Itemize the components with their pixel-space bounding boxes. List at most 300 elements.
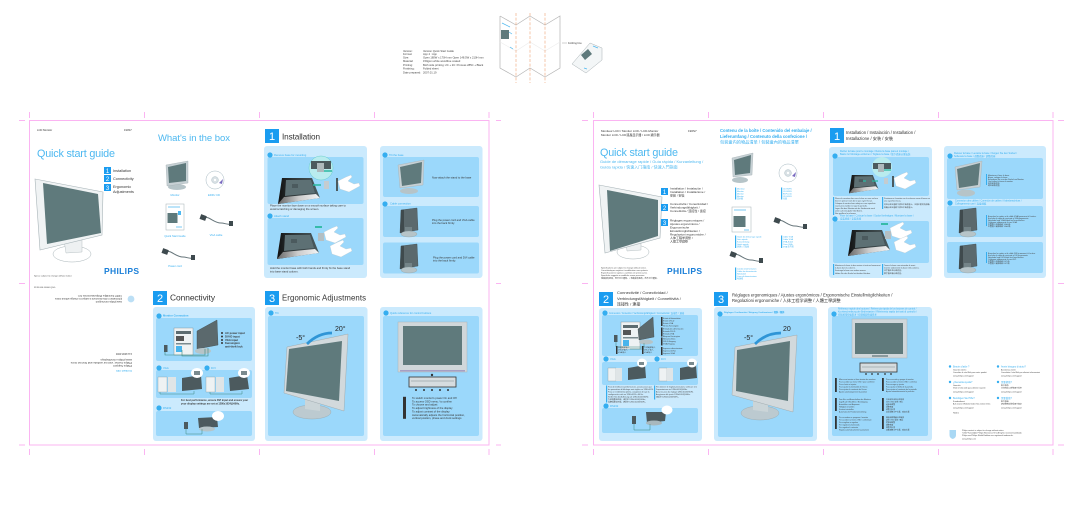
step A instructions: Non graffiare lo schermo. — [835, 212, 857, 215]
cover monitor: right sheet — [599, 185, 662, 259]
upside-down back cover: contact info: Contact info — [116, 369, 132, 373]
heading: contents of the box multilingual: Contenu de la boîte / Contenido del embalaje / — [720, 128, 813, 133]
step C monitor: 現在安裝底座。 — [988, 183, 1001, 187]
box item: guide with languages: Kurzanleitung — [737, 240, 749, 244]
step D heading — [947, 200, 1022, 206]
contact block: right column: www.philips.com/support — [1001, 406, 1022, 410]
button legend: Para encender y apagar el monitor — [886, 378, 914, 381]
button legend: Para ajustar el contraste de la pantalla — [886, 388, 917, 391]
cover footnotes: right sheet — [601, 266, 659, 280]
step D first rear view — [400, 208, 475, 237]
box item: VGA with languages — [773, 217, 807, 248]
port legend: DVI-D input — [225, 334, 240, 338]
cover footnotes — [34, 274, 73, 289]
step D power: RS232 — [163, 406, 172, 410]
connection diagram — [614, 317, 654, 349]
upside-down back cover: contact info: www.philips.com/displays — [100, 358, 132, 362]
contact block: right column: 請瀏覽網站取得更多資訊 — [1001, 402, 1022, 406]
step B note — [270, 266, 351, 274]
print specification block: 2007.01.19 — [423, 70, 437, 74]
panel: installation right — [380, 146, 482, 278]
step B instructions: 雙手握住顯示器底座。 — [884, 271, 903, 275]
step A instructions: unten auf eine glatte Oberfläche. — [835, 210, 863, 212]
step B instructions: Maintenez la base à deux mains et insérez fermement — [835, 264, 881, 267]
step B VGA: VGA — [163, 366, 169, 370]
upside-down back cover: legal notes: Information in this document is subject to change without notice — [54, 297, 122, 300]
step B instructions: 双手握住显示器底座。 — [884, 268, 903, 272]
button legend: 选择和调整 — [886, 402, 895, 406]
port legends: VGA 輸入 — [644, 350, 652, 354]
button legend: Regola automaticamente la posizione — [839, 428, 869, 432]
contents index: right sheet: Verbindungsfähigkeit / — [670, 206, 700, 210]
upside-down back cover: contact info: 411-9388-0000 — [115, 352, 132, 355]
contact block: right column: www.philips.com/support — [1001, 374, 1022, 378]
button legend: Per regolare il contrasto — [839, 426, 858, 429]
control button legend: vertical position, phase and clock settings — [412, 416, 462, 420]
step B illustration — [848, 222, 916, 256]
box item: power cord: Power cord — [168, 264, 182, 268]
print specification block: Printing: — [403, 63, 413, 67]
performance notes: configuración está en 1280x1024 a 60 Hz. — [608, 393, 644, 396]
performance notes: Asegúrese del ajuste 1280x1024@60Hz. — [656, 393, 691, 396]
box item: monitor with languages: Monitor — [737, 195, 744, 198]
upside-down back cover: contact info: Philips Center, visit our website and find out more — [70, 361, 132, 365]
heading: What's in the box: What's in the box — [158, 133, 230, 144]
title: Quick start guide multilingual: Quick start guide — [600, 147, 678, 159]
subtitle languages: Guide de démarrage rapide / Guía rápida / Kurzanleitung / — [600, 159, 704, 164]
button legend: Mise sous tension et hors tension du moniteur — [839, 378, 876, 381]
step C heading: Relever la base / Levante la base / Neigen Sie den Sockel / — [954, 152, 1017, 155]
button legend: Auswählen und Anpassen — [839, 403, 860, 406]
box item: power cord with languages: Netzkabel — [737, 272, 746, 276]
port legend: VGA input — [225, 338, 238, 342]
step A illustration — [849, 157, 916, 193]
contents index: right sheet: 2 — [663, 206, 667, 212]
button legend: 調整亮度 — [886, 422, 893, 426]
performance notes: Per ottenere le migliori prestazioni, verificare che — [656, 386, 697, 388]
button legend: 開啟和關閉顯示器電源 — [886, 415, 904, 419]
heading: installation multilingual: Installazione / 安装 / 安裝 — [846, 135, 894, 142]
port legends: Entrée DVI-D — [663, 320, 675, 322]
button legend: 开启和关闭显示器电源 — [886, 397, 904, 401]
step D first rear view with text: 牢固插入电源线和 VGA 线。 — [988, 222, 1012, 226]
contents index: right sheet — [661, 186, 708, 244]
step A illustration — [278, 156, 360, 204]
port legends: Entrée VGA — [663, 322, 674, 325]
performance notes: 为获得最佳性能，请设定 1280x1024@60Hz。 — [608, 397, 647, 401]
step D second rear view: Plug the power cord and DVI cable — [433, 256, 475, 260]
control button legend — [403, 396, 465, 420]
step A heading: Remove base for mounting — [274, 153, 307, 157]
heading: Ergonomic Adjustments — [265, 291, 366, 305]
contact block: left column: Garantie clients : — [953, 368, 968, 372]
contact block: left column: Benötigen Sie Hilfe? — [953, 397, 975, 400]
button legend: Pour accéder au menu OSD / pour confirmer — [839, 382, 875, 384]
port legend: Kensington — [225, 341, 240, 345]
panel: tilt multilingual — [714, 307, 817, 441]
Philips logo: right sheet: PHILIPS — [667, 266, 702, 276]
contents index: right sheet: Connettività / 连接性 / 連接 — [670, 208, 706, 213]
contact block: right column: Avete bisogno di aiuto? — [1001, 366, 1026, 368]
port legends: VGA 输入 — [618, 350, 626, 354]
step D second rear view with text: Branchez le cordon et le câble DVI fermement à l'arrière. — [988, 252, 1036, 255]
box item: power cord with languages: 电源线 — [737, 276, 743, 280]
Philips shield and legal note — [950, 429, 1023, 440]
performance notes: 请设定 1280x1024@60Hz。 — [656, 394, 680, 398]
box item: guide with languages — [732, 207, 762, 248]
print specification block — [403, 49, 484, 74]
cover header: right sheet: 190S7 — [688, 129, 697, 133]
upside-down back cover: contact info: Philips Support — [113, 364, 132, 368]
contents index: right sheet: Ajustes ergonómicos / — [670, 222, 700, 226]
title: Quick start guide: Quick start guide — [37, 148, 115, 160]
contact block: right column: 需要幫助? — [1001, 396, 1013, 400]
print specification block: Date prepared: — [403, 70, 421, 74]
heading: connectivity multilingual: 连接性 / 連接 — [617, 300, 640, 306]
box item: monitor with languages: 显示器 — [737, 196, 743, 200]
performance notes: Para un rendimiento óptimo, asegúrese de que la — [608, 390, 650, 394]
heading: Connectivity: 2 — [157, 293, 163, 305]
contact block: right column: 客戶服務: — [1001, 399, 1010, 403]
performance note — [181, 399, 248, 406]
cover header: left sheet: LCD Monitor — [37, 128, 52, 132]
heading: Installation: 1 — [269, 131, 275, 143]
step A instructions: suave procurando no rayar la pantalla. — [835, 204, 868, 208]
step A instructions: Coloque el monitor boca abajo en una superficie — [835, 202, 876, 205]
step A note: Place the monitor face down on a smooth surface taking care to — [270, 204, 346, 208]
port legends — [616, 317, 683, 355]
print specification block: Folded sheet — [423, 66, 439, 70]
cover footnotes: right sheet: Specifiche soggette a modifiche senza preavviso. — [601, 274, 645, 277]
panel: installation multilingual left — [829, 147, 932, 278]
contact block: left column: ¿Necesita ayuda? — [953, 381, 973, 384]
heading: Ergonomic Adjustments: Ergonomic Adjustments — [282, 294, 366, 302]
button legend: Para acceder al menú OSD / confirmar — [886, 382, 917, 384]
port legends: Entrada VGA — [663, 332, 675, 336]
step A heading: Tilt — [275, 311, 279, 315]
button legend: Per regolare la luminosità — [839, 424, 859, 426]
step B heading: 控制按钮快速参考 / 控制按鈕快速參考 — [838, 312, 877, 316]
step A instructions: Placez le moniteur face vers le bas sur une surface — [835, 197, 878, 200]
box item: VGA cable — [199, 214, 233, 237]
cover monitor illustration — [35, 179, 103, 262]
upside-down back cover: legal notes: ©2007 Koninklijke Philips Electronics N.V. — [77, 294, 122, 297]
performance notes: l'impostazione sia 1280x1024@60Hz. — [656, 388, 688, 391]
Philips logo: PHILIPS — [104, 266, 139, 276]
contact block: left column: www.philips.com/support — [953, 374, 974, 378]
heading: Connectivity: Connectivity — [170, 292, 216, 302]
panel: connectivity — [153, 307, 255, 441]
box item: VGA with languages: Cable VGA — [783, 238, 794, 241]
print specification block: Size: — [403, 56, 409, 60]
contents index: Installation — [113, 169, 131, 173]
box item: power cord with languages — [729, 251, 763, 280]
contents index: 3 — [106, 186, 110, 192]
button legend: 訪問 OSD 選單 / 確認 — [886, 418, 903, 422]
performance note: your display settings are set at 1280x1024@60Hz. — [181, 402, 240, 406]
contents index: right sheet: 1 — [663, 190, 667, 196]
step A heading: Retirer la base pour le montage / Retire la base para el montaje / — [840, 150, 909, 153]
button legend: Zugriff auf OSD-Menü / Bestätigung — [839, 400, 868, 404]
tilt illustration — [732, 326, 797, 420]
heading: Connectivity — [153, 291, 216, 305]
step C monitor: Ahora, coloque la base. — [988, 176, 1008, 179]
heading: contents of the box multilingual — [720, 128, 813, 146]
step C heading: Tilt the base — [389, 153, 404, 157]
button legend: 自动调整水平位置、垂直位置 — [886, 410, 910, 414]
contact block: right column: 需要帮助? — [1001, 380, 1013, 384]
step A instructions: lisse en prenant soin de ne pas rayer l'écran. — [835, 200, 873, 202]
step C DVI: DVI — [661, 357, 666, 361]
step D power: RS232 — [610, 404, 619, 408]
heading: connectivity multilingual: Connectivité / Conectividad / — [617, 290, 669, 295]
box item: monitor with languages: Monitor — [737, 192, 744, 196]
step B instructions: Tenere la base con entrambe le mani. — [884, 264, 916, 267]
button legend: Kontrast einstellen — [839, 408, 854, 411]
performance notes — [606, 386, 697, 404]
contact block: right column: 客户服务: — [1001, 383, 1010, 387]
cover header: left sheet — [37, 128, 132, 132]
contact block: right column: www.philips.com/support — [1001, 390, 1022, 394]
port legends: Entrée d'alimentation — [663, 317, 681, 320]
cover footnotes: right sheet: Especificaciones sujetas a cambios sin previo aviso. — [601, 272, 648, 274]
button legend: Ajusta automáticamente la posición — [886, 390, 914, 393]
contents index: right sheet: Einstellmöglichkeiten / — [670, 229, 700, 233]
heading: installation multilingual — [830, 128, 916, 143]
control button legend: To adjust brightness of the display — [412, 406, 453, 410]
Philips shield and legal note: www.philips.com — [962, 438, 976, 440]
box item: EDFU CD — [206, 171, 224, 197]
step D second rear view with text: 牢固插入电源线和 DVI 线。 — [988, 259, 1011, 263]
control button strip — [409, 374, 456, 391]
contents index: 2 — [106, 177, 110, 183]
box item: CD with languages: EDFU-CD — [783, 194, 793, 196]
heading: contents of the box multilingual: Lieferumfang / Contenuto della confezione / — [720, 134, 808, 139]
box item: VGA cable: VGA cable — [210, 233, 223, 237]
folded booklet thumbnail — [572, 43, 602, 73]
button legend: 調整對比度 — [886, 425, 895, 429]
step A instructions: una superficie liscia. — [884, 200, 901, 202]
box item: EDFU CD: EDFU CD — [208, 193, 220, 197]
step D second rear view with text: Collegare saldamente il cavo DVI. — [988, 258, 1017, 261]
port legends: Bloqueo Kensington — [663, 335, 680, 338]
step A heading — [832, 150, 911, 159]
contents index: Ergonomic — [113, 185, 131, 189]
button legend: 访问 OSD 菜单 / 确认 — [886, 400, 903, 404]
contact block: left column: Visite el sitio web para obtener soporte — [953, 386, 986, 390]
print specification block: Both side printing: 2C + 2C: Process 285C + Black — [423, 63, 484, 67]
box item: monitor: Monitor — [171, 193, 180, 197]
heading: connectivity multilingual — [599, 290, 682, 306]
step D first rear view with text: Collegare saldamente il cavo VGA. — [988, 221, 1018, 224]
port legend: anti-theft lock — [225, 344, 243, 348]
box item: power cord with languages: Cavo di alimentazione — [737, 275, 758, 278]
box item: CD with languages: CD EDFU — [783, 191, 792, 193]
heading: Installation — [265, 129, 320, 143]
port legends: VGA-Eingang — [663, 342, 675, 346]
contents index: right sheet: Connectivité / Conectividad / — [670, 202, 708, 206]
step D first rear view with text: Branchez le cordon et le câble VGA fermement à l'arrière. — [988, 215, 1037, 218]
contents index: right sheet: Installation / Installazione / — [670, 190, 705, 194]
step C monitor: Now attach the stand to the base — [432, 176, 472, 180]
control button strip — [860, 363, 897, 375]
step B heading: Référence rapide des boutons / Referencia rápida de los botones de control / — [838, 308, 917, 310]
box item: power cord with languages: Cable de alimentación — [737, 270, 757, 273]
button legend: 選擇和調整 — [886, 420, 895, 424]
control button legend: To access OSD menu / to confirm — [412, 399, 453, 403]
box item: power cord with languages: Cordon d'alimentation — [737, 268, 756, 270]
step D second rear view: into the back firmly. — [433, 258, 456, 262]
port legends: Entrada DVI-D — [663, 330, 676, 333]
step B illustration — [277, 226, 352, 259]
contact block: right column: Assistenza clienti: — [1001, 368, 1017, 372]
step C monitor: Ora fissare la base al monitor. — [988, 180, 1014, 183]
performance notes: Assurez-vous du réglage 1280x1024@60Hz. — [656, 390, 694, 394]
step B instructions: Sostenga la base con ambas manos. — [835, 269, 867, 272]
performance notes: Pour de meilleures performances, assurez-vous que — [608, 386, 652, 388]
step A instructions: Posizionare il monitor con lo schermo verso il basso su — [884, 197, 930, 200]
step B instructions: inserire saldamente la base nella colonna. — [884, 266, 920, 270]
control button legend: To switch monitor's power On and Off — [412, 396, 457, 400]
step D first rear view with text: Netzkabel und VGA-Kabel fest anschließen. — [988, 219, 1025, 222]
panel: connectivity multilingual — [599, 308, 702, 441]
step B instructions: Halten Sie den Sockel mit beiden Händen. — [835, 272, 871, 275]
upside-down back cover: legal notes — [54, 294, 134, 303]
heading: connectivity multilingual: Verbindungsfähigkeit / Connettività / — [617, 296, 682, 301]
step A instructions: 將顯示器正面朝下放在平滑表面上。 — [884, 205, 914, 209]
step D first rear view: Plug the power cord and VGA cable — [432, 218, 475, 222]
contents index: right sheet: Regolazioni ergonomiche / — [670, 232, 706, 236]
button legend: Helligkeit einstellen — [839, 406, 854, 408]
upside-down back cover: legal notes: www.philips.com/support — [95, 300, 122, 303]
heading: ergonomic multilingual: 3 — [718, 294, 724, 306]
step A heading: Connexion / Conexión / Verbindungsfähigkeit / Connettività / 连接性 / 連接 — [609, 311, 685, 315]
performance notes: Stellen Sie die Auflösung auf 1280x1024@60Hz. — [608, 396, 649, 398]
box item: monitor with languages — [732, 153, 753, 200]
step D heading: Cable connection — [390, 202, 411, 206]
port legends: Entrada de alimentación — [663, 328, 683, 330]
contents index: right sheet: Réglages ergonomiques / — [670, 218, 704, 222]
button legend: 自動調整水平位置、垂直位置 — [886, 428, 910, 432]
contact block: left column: Consultez le site Web pour votre produit — [953, 371, 987, 374]
cover header: left sheet: 190S7 — [124, 128, 132, 132]
control button legend: Automatically adjusts the horizontal position, — [412, 413, 465, 417]
cover header: right sheet: Moniteur LCD / Monitor LCD / LCD-Monitor — [601, 129, 658, 133]
button legend: Zum Ein- und Ausschalten des Monitors — [839, 398, 871, 401]
contact block: left column: www.philips.com/support — [953, 390, 974, 394]
step C heading — [947, 152, 1017, 159]
print specification block: 150gsm white woodfree coated — [423, 59, 461, 63]
front monitor — [398, 322, 467, 372]
panel: installation left — [264, 146, 367, 278]
contents index: right sheet: Ergonomische — [670, 226, 690, 230]
button legend: Para escoger y ajustar — [886, 383, 904, 386]
cover footnotes: 3139 000 00000 QSG — [34, 287, 56, 289]
performance note: For best performance, ensure DVI input and ensure your — [181, 399, 248, 402]
contact block: left column: Garantía: — [953, 384, 961, 387]
contact block: left column — [949, 365, 990, 414]
step A note: avoid scratching or damaging the screen. — [270, 207, 319, 211]
cover header: right sheet — [601, 129, 697, 137]
button legend: Ajuste automatiquement la position — [839, 390, 867, 394]
subtitle languages — [600, 159, 704, 170]
button legend: 调整对比度 — [886, 407, 895, 411]
button legend — [835, 378, 917, 432]
Philips shield and legal note: Philips and Philips Shield Emblem are registered trademarks. — [962, 434, 1014, 437]
cover header: right sheet: Monitor LCD / LCD液晶显示器 / LCD 顯示器 — [601, 132, 660, 137]
contents index: right sheet: 3 — [663, 221, 667, 227]
contact block: left column: Besoin d'aide ? — [953, 366, 970, 368]
heading: installation multilingual: Installation / Instalación / Installation / — [846, 130, 916, 135]
step B heading: 安装底座 / 安裝底座 — [840, 216, 862, 220]
step B heading: Kurzbeschreibung der Bedientasten / Riferimento rapido dei tasti di controllo / — [838, 310, 917, 314]
step D heading: Collegamento cavi / 连接线缆 — [955, 202, 987, 206]
Philips shield and legal note: Philips contact is subject to change without notice. — [962, 429, 1005, 432]
fold diagram — [500, 13, 582, 83]
cover footnotes: right sheet: Specifications are subject to change without notice. — [601, 266, 647, 270]
step A note — [270, 204, 346, 211]
button legend: Para ajustar el brillo de la pantalla — [886, 386, 913, 388]
print specification block: Format: — [403, 52, 413, 56]
step B heading: Fixer la base / Colocar la base / Sockel befestigen / Montare la base / — [840, 214, 914, 218]
subtitle languages: Guida rapida / 快速入门指南 / 快速入門指南 — [600, 164, 678, 170]
button legend: Automatische Positionseinstellung — [839, 410, 866, 414]
step C monitor: Befestigen Sie nun den Sockel am Monitor. — [988, 178, 1025, 181]
step A instructions: 将显示器正面朝下放在平滑表面上，注意不要刮伤屏幕。 — [884, 202, 931, 206]
port legends: DVI-D 输入 — [618, 348, 628, 352]
control button legend: To adjust contrast of the display — [412, 410, 450, 414]
button legend: Per scegliere e regolare — [839, 422, 858, 424]
box item: VGA with languages: VGA-Kabel — [783, 240, 794, 244]
button legend: Per accedere al menu OSD / confermare — [839, 420, 872, 422]
heading: ergonomic multilingual: Regolazioni ergonomiche / 人体工程学调整 / 人體工學調整 — [732, 297, 841, 304]
step B instructions — [833, 264, 920, 275]
step B heading: Quick reference for control buttons — [390, 311, 432, 315]
box item: guide with languages: Guía rápida — [737, 239, 748, 241]
tilt illustration: -5° — [296, 334, 305, 342]
heading: ergonomic multilingual — [714, 292, 893, 306]
performance notes: 為獲得最佳性能，請設定 1280x1024@60Hz。 — [608, 400, 647, 404]
heading: contents of the box multilingual: 包装盒内的物品清单 / 包裝盒內的物品清單 — [720, 138, 799, 146]
contents index: right sheet: 安装 / 安裝 — [670, 192, 685, 198]
contact block: right column: Consultate il sito Web per ulteriori informazioni — [1001, 371, 1041, 374]
contents index — [104, 167, 134, 194]
box item: guide with languages: Guida rapida — [737, 244, 749, 246]
step C monitor: Maintenant, fixez la base. — [988, 174, 1010, 177]
print specification block: Material: — [403, 59, 414, 63]
port legends: 交流电源输入 — [618, 345, 629, 349]
heading: connectivity multilingual: 2 — [603, 294, 609, 306]
box item: CD with languages: CD EDFU — [783, 196, 792, 198]
step B instructions: la base dans la colonne. — [835, 268, 856, 270]
box item: CD with languages: CD EDFU — [783, 188, 792, 190]
box item: CD with languages — [779, 164, 797, 200]
step D second rear view with text: 牢固插入電源線和 DVI 線。 — [988, 261, 1011, 265]
port legends: DVI-D 輸入 — [644, 348, 654, 352]
panel: installation multilingual right — [944, 146, 1046, 278]
cover footnotes: Specs subject to change without notice — [34, 274, 73, 278]
step D first rear view: into the back firmly. — [432, 221, 455, 225]
port legends: Verrou Kensington — [663, 324, 679, 328]
contents index: 1 — [106, 169, 110, 175]
contact block: left column: Auf unserer Website finden Sie weitere Infos — [953, 402, 990, 406]
port legends: Ingresso VGA — [663, 352, 676, 355]
port legends: Netzanschluss — [663, 338, 675, 340]
performance notes: les paramètres d'affichage sont réglés sur 1280x1024. — [608, 388, 654, 391]
step B heading: Attach stand — [274, 214, 289, 218]
port legends: 交流電源輸入 — [644, 345, 655, 349]
step D second rear view with text — [959, 244, 1036, 273]
